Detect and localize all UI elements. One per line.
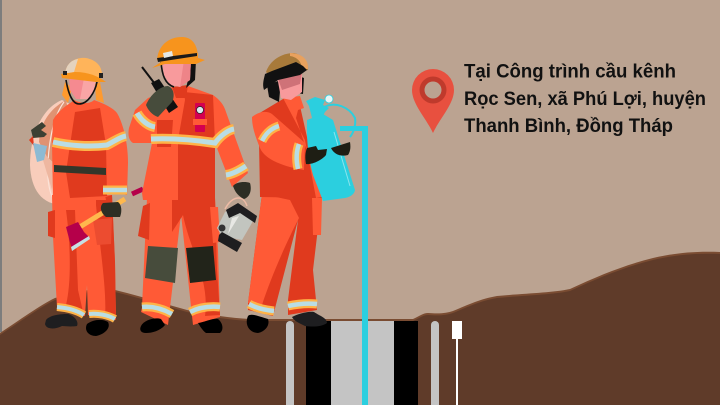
- ground: [0, 252, 720, 405]
- face: [162, 60, 191, 87]
- pocket: [258, 203, 283, 239]
- firefighter 1: [29, 58, 143, 336]
- chest band: [151, 129, 234, 143]
- hose coil: [30, 100, 70, 205]
- arm: [252, 112, 305, 170]
- oxygen pipe: [362, 126, 368, 405]
- jacket: [253, 97, 322, 198]
- helmet: [157, 37, 198, 62]
- jacket: [128, 86, 248, 200]
- tank and regulator: [306, 95, 365, 201]
- leg bands: [249, 304, 274, 311]
- sleeve bands: [137, 113, 155, 127]
- gloves: [305, 146, 327, 164]
- leg bands: [57, 307, 84, 315]
- well shaft: [286, 321, 439, 405]
- glove: [101, 202, 121, 217]
- cuff band: [103, 186, 127, 194]
- location text: Tại Công trình cầu kênh: [464, 62, 676, 82]
- hair: [267, 80, 281, 102]
- badge: [195, 103, 205, 132]
- sleeve bands: [262, 126, 279, 141]
- belt: [54, 165, 106, 175]
- gas mask: [217, 203, 257, 252]
- location text: [464, 62, 706, 137]
- chest band: [53, 136, 126, 146]
- hair: [62, 82, 104, 103]
- hair strap: [186, 58, 196, 88]
- boots: [45, 314, 78, 328]
- knee pads: [145, 246, 178, 283]
- leg bands: [142, 307, 172, 314]
- helmet: [266, 53, 308, 76]
- location text: Thanh Bình, Đồng Tháp: [464, 116, 673, 137]
- icon: location pin: [412, 69, 454, 133]
- boots: [140, 318, 165, 333]
- left hand: [31, 122, 47, 138]
- mask strap: [225, 198, 247, 209]
- firefighter 2: [128, 37, 257, 333]
- marker post: [452, 321, 462, 405]
- face: [277, 72, 302, 100]
- gloved hand: [146, 86, 174, 117]
- firefighter 3: [247, 53, 365, 333]
- face: [69, 76, 96, 99]
- helmet: [65, 58, 102, 78]
- location text: Rọc Sen, xã Phú Lợi, huyện: [464, 89, 706, 110]
- right glove: [233, 182, 251, 199]
- cup: [33, 143, 47, 162]
- axe head: [66, 222, 90, 250]
- boots: [247, 315, 269, 333]
- radio: [142, 67, 155, 84]
- axe handle: [70, 199, 125, 233]
